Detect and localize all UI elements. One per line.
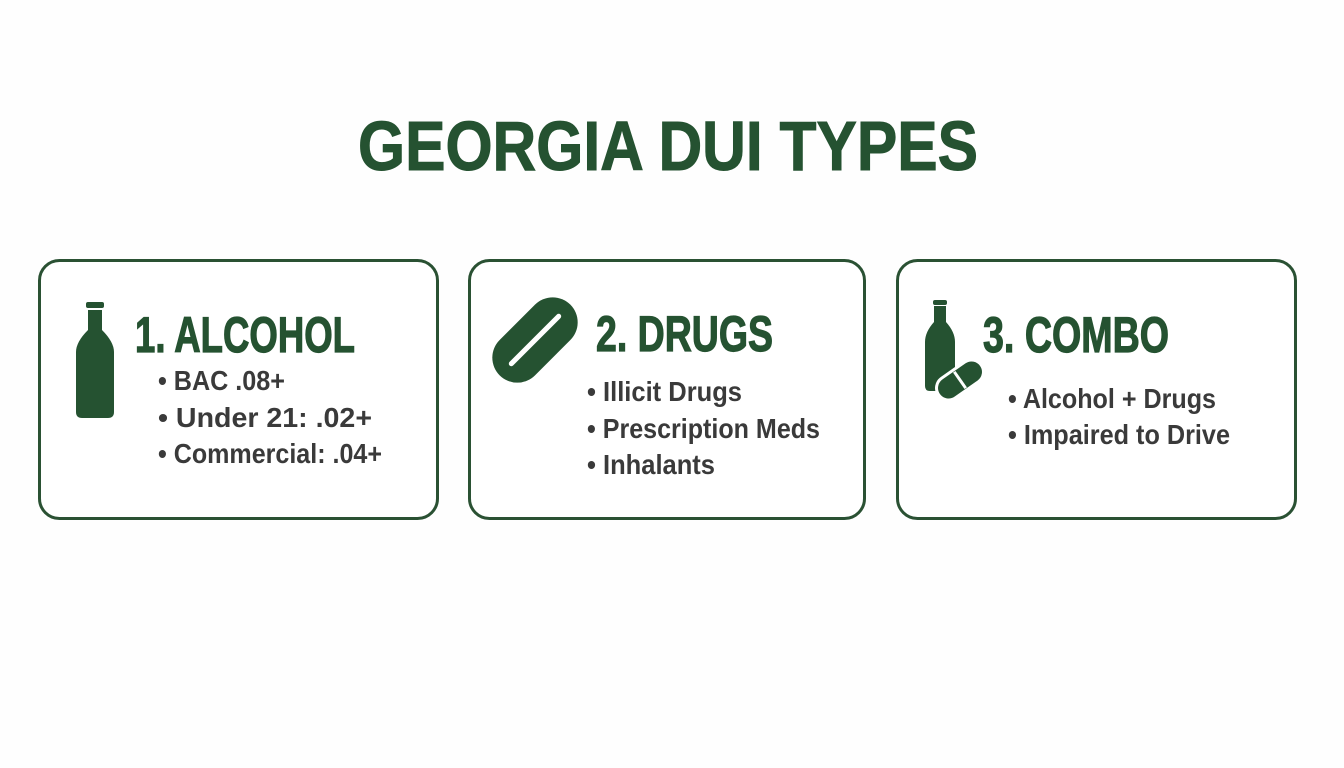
icon: bottle	[76, 302, 114, 418]
bullet list: alcohol: • Commercial: .04+	[158, 438, 382, 469]
icon: bottle and pill	[925, 300, 988, 405]
bullet list: drugs: • Prescription Meds	[587, 413, 820, 444]
heading: 1. ALCOHOL: 1. ALCOHOL	[135, 307, 355, 363]
panel: drugs	[470, 260, 864, 518]
heading: 2. DRUGS: 2. DRUGS	[596, 306, 773, 362]
bullet list: alcohol	[158, 365, 382, 469]
icon: pill	[482, 287, 588, 393]
heading: 3. COMBO: 3. COMBO	[983, 307, 1169, 363]
panel: alcohol	[40, 260, 438, 518]
bullet list: combo: • Alcohol + Drugs	[1008, 383, 1216, 414]
bullet list: drugs: • Inhalants	[587, 449, 715, 480]
title: GEORGIA DUI TYPES	[358, 107, 978, 185]
panel: combo	[898, 260, 1296, 518]
bullet list: alcohol: • Under 21: .02+	[158, 402, 372, 433]
bullet list: combo: • Impaired to Drive	[1008, 419, 1230, 450]
bullet list: drugs: • Illicit Drugs	[587, 376, 742, 407]
bullet list: drugs	[587, 376, 820, 480]
bullet list: combo	[1008, 383, 1230, 450]
bullet list: alcohol: • BAC .08+	[158, 365, 285, 396]
